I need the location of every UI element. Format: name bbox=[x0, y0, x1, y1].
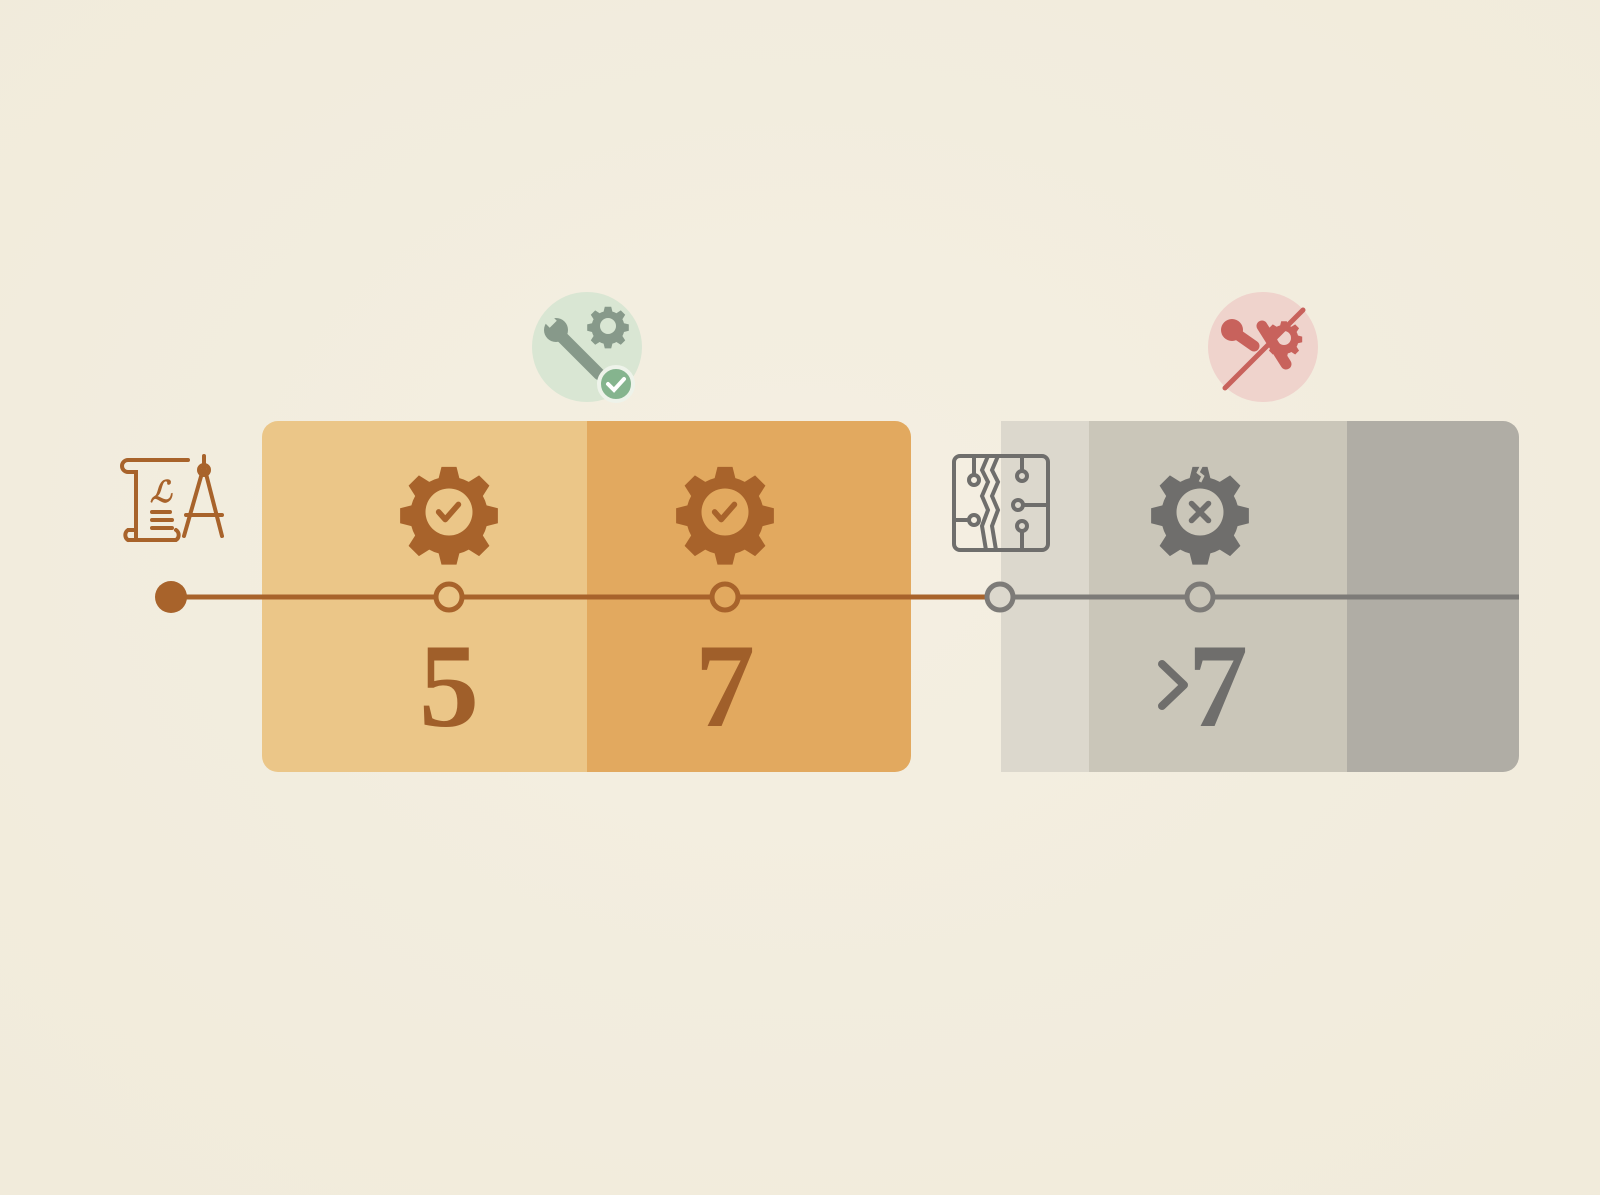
panel: orange supported range bbox=[262, 421, 911, 772]
panel: gray unsupported range bbox=[1001, 421, 1519, 772]
icon: spec scroll and compass: ℒ bbox=[150, 476, 173, 509]
icon: red no-maintenance badge bbox=[1208, 292, 1318, 402]
icon: gear check 2 bbox=[676, 467, 774, 565]
icon: broken circuit bbox=[954, 456, 1048, 550]
number >7: 7 bbox=[1188, 619, 1248, 752]
timeline bbox=[155, 581, 1519, 613]
icon: green maintenance badge bbox=[532, 292, 642, 402]
number 5: 5 bbox=[419, 619, 479, 752]
number 7: 7 bbox=[695, 619, 755, 752]
icon: broken gear x bbox=[1151, 465, 1249, 565]
icon: spec scroll and compass bbox=[122, 456, 222, 540]
number >7 bbox=[1162, 619, 1248, 752]
icon: gear check 1 bbox=[400, 467, 498, 565]
